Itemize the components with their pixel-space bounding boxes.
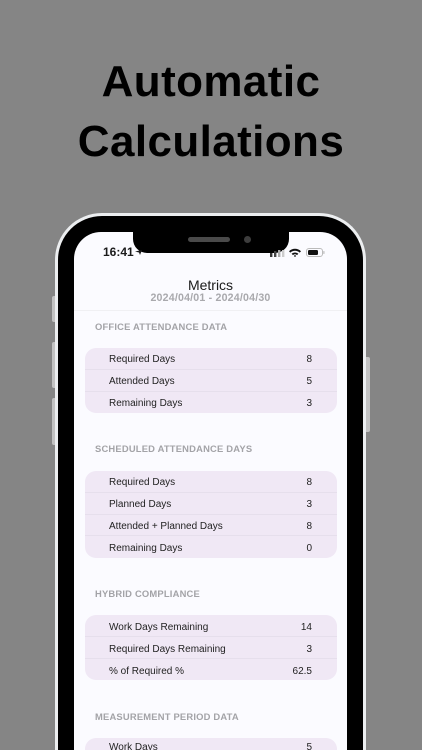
panel: measurement period data bbox=[85, 738, 337, 750]
row: work days remaining bbox=[109, 622, 312, 633]
row: percent of required: % of Required % bbox=[109, 666, 184, 677]
date range: 2024/04/01 - 2024/04/30 bbox=[150, 292, 271, 304]
app screen bbox=[74, 232, 347, 750]
panel: hybrid compliance bbox=[85, 615, 337, 680]
heading: office attendance data: OFFICE ATTENDANCE DATA bbox=[95, 321, 227, 332]
camera bbox=[244, 236, 251, 243]
row: attended + planned days bbox=[109, 521, 312, 532]
heading: hybrid compliance: HYBRID COMPLIANCE bbox=[95, 588, 200, 599]
row: required days remaining: Required Days Remaining bbox=[109, 644, 226, 655]
status time: 16:41 bbox=[103, 245, 134, 259]
phone body bbox=[55, 213, 366, 750]
row: attended + planned days: 8 bbox=[306, 521, 312, 532]
row: required days: 8 bbox=[306, 477, 312, 488]
panel: scheduled attendance days bbox=[85, 471, 337, 558]
row: remaining days: 3 bbox=[306, 398, 312, 409]
row: required days bbox=[109, 477, 312, 488]
row: required days remaining bbox=[109, 644, 312, 655]
row: attended days bbox=[109, 376, 312, 387]
row: work days remaining: 14 bbox=[301, 622, 312, 633]
title: Automatic bbox=[102, 57, 320, 106]
row: percent of required: 62.5 bbox=[293, 666, 312, 677]
row: attended days: 5 bbox=[306, 376, 312, 387]
row: required days bbox=[109, 354, 312, 365]
row: percent of required bbox=[109, 666, 312, 677]
row: remaining days bbox=[109, 398, 312, 409]
row: attended + planned days: Attended + Planned Days bbox=[109, 521, 223, 532]
row: remaining days: Remaining Days bbox=[109, 543, 182, 554]
row: planned days: 3 bbox=[306, 499, 312, 510]
speaker bbox=[188, 237, 230, 242]
row: remaining days: 0 bbox=[306, 543, 312, 554]
icon: wifi bbox=[289, 248, 301, 257]
heading: measurement period data: MEASUREMENT PERIOD DATA bbox=[95, 711, 239, 722]
row: work days remaining: Work Days Remaining bbox=[109, 622, 208, 633]
notch bbox=[133, 232, 289, 253]
row: remaining days bbox=[109, 543, 312, 554]
row: work days bbox=[109, 742, 312, 750]
row: required days remaining: 3 bbox=[306, 644, 312, 655]
icon: location arrow bbox=[135, 250, 142, 255]
row: planned days bbox=[109, 499, 312, 510]
row: required days: 8 bbox=[306, 354, 312, 365]
title: Calculations bbox=[78, 117, 344, 166]
row: planned days: Planned Days bbox=[109, 499, 171, 510]
right power button bbox=[365, 357, 370, 432]
icon: cellular signal bbox=[270, 250, 284, 257]
panel: office attendance data bbox=[85, 348, 337, 413]
icon: battery bbox=[306, 248, 324, 257]
left volume down button bbox=[52, 398, 57, 445]
heading: scheduled attendance days: SCHEDULED ATTENDANCE DAYS bbox=[95, 443, 252, 454]
left mute button bbox=[52, 296, 57, 322]
left volume up button bbox=[52, 342, 57, 388]
screen title: Metrics bbox=[188, 277, 233, 293]
row: remaining days: Remaining Days bbox=[109, 398, 182, 409]
row: required days: Required Days bbox=[109, 477, 175, 488]
title bbox=[78, 57, 344, 166]
phone mockup bbox=[52, 213, 370, 750]
row: required days: Required Days bbox=[109, 354, 175, 365]
row: attended days: Attended Days bbox=[109, 376, 175, 387]
